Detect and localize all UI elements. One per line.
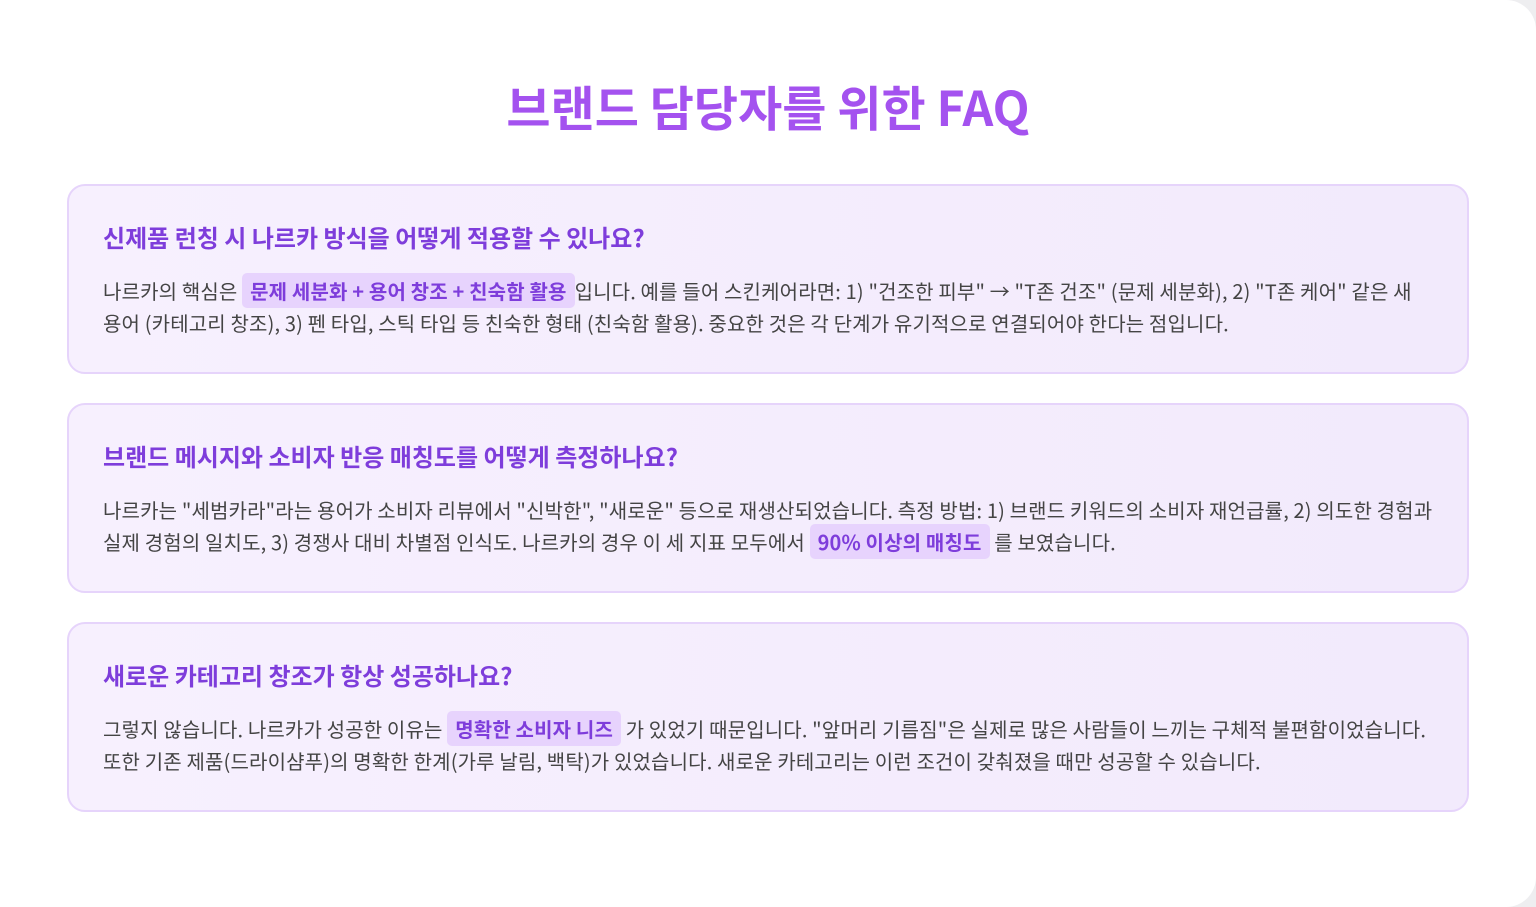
answer 1: 용어 (카테고리 창조), 3) 펜 타입, 스틱 타입 등 친숙한 형태 (친숙함 활용). 중요한 것은 각 단계가 유기적으로 연결되어야 한다는 점입니다.	[103, 308, 1229, 337]
title: 브랜드 담당자를 위한 FAQ	[506, 70, 1030, 140]
panel: FAQ 2	[67, 403, 1469, 593]
answer 3: 또한 기존 제품(드라이샴푸)의 명확한 한계(가루 날림, 백탁)가 있었습니다. 새로운 카테고리는 이런 조건이 갖춰졌을 때만 성공할 수 있습니다.	[103, 746, 1261, 775]
panel: FAQ 1	[67, 184, 1469, 374]
question 1: 신제품 런칭 시 나르카 방식을 어떻게 적용할 수 있나요?	[103, 219, 645, 254]
answer 2: 나르카는 "세범카라"라는 용어가 소비자 리뷰에서 "신박한", "새로운" 등으로 재생산되었습니다. 측정 방법: 1) 브랜드 키워드의 소비자 재언급률, 2) 의도한 경험과	[103, 495, 1432, 524]
answer 2: 실제 경험의 일치도, 3) 경쟁사 대비 차별점 인식도. 나르카의 경우 이 세 지표 모두에서 90% 이상의 매칭도 를 보였습니다.	[103, 527, 1116, 556]
answer 1	[103, 273, 1412, 337]
panel: FAQ 3	[67, 622, 1469, 812]
answer 3	[103, 711, 1426, 775]
question 2: 브랜드 메시지와 소비자 반응 매칭도를 어떻게 측정하나요?	[103, 438, 678, 473]
question 3: 새로운 카테고리 창조가 항상 성공하나요?	[103, 657, 512, 692]
answer 3: 그렇지 않습니다. 나르카가 성공한 이유는 명확한 소비자 니즈 가 있었기 때문입니다. "앞머리 기름짐"은 실제로 많은 사람들이 느끼는 구체적 불편함이었습니다.	[103, 714, 1426, 743]
answer 2	[103, 495, 1432, 559]
answer 1: 나르카의 핵심은 문제 세분화 + 용어 창조 + 친숙함 활용 입니다. 예를 들어 스킨케어라면: 1) "건조한 피부" → "T존 건조" (문제 세분화), 2) "T존 케어" 같은 새	[103, 276, 1412, 305]
